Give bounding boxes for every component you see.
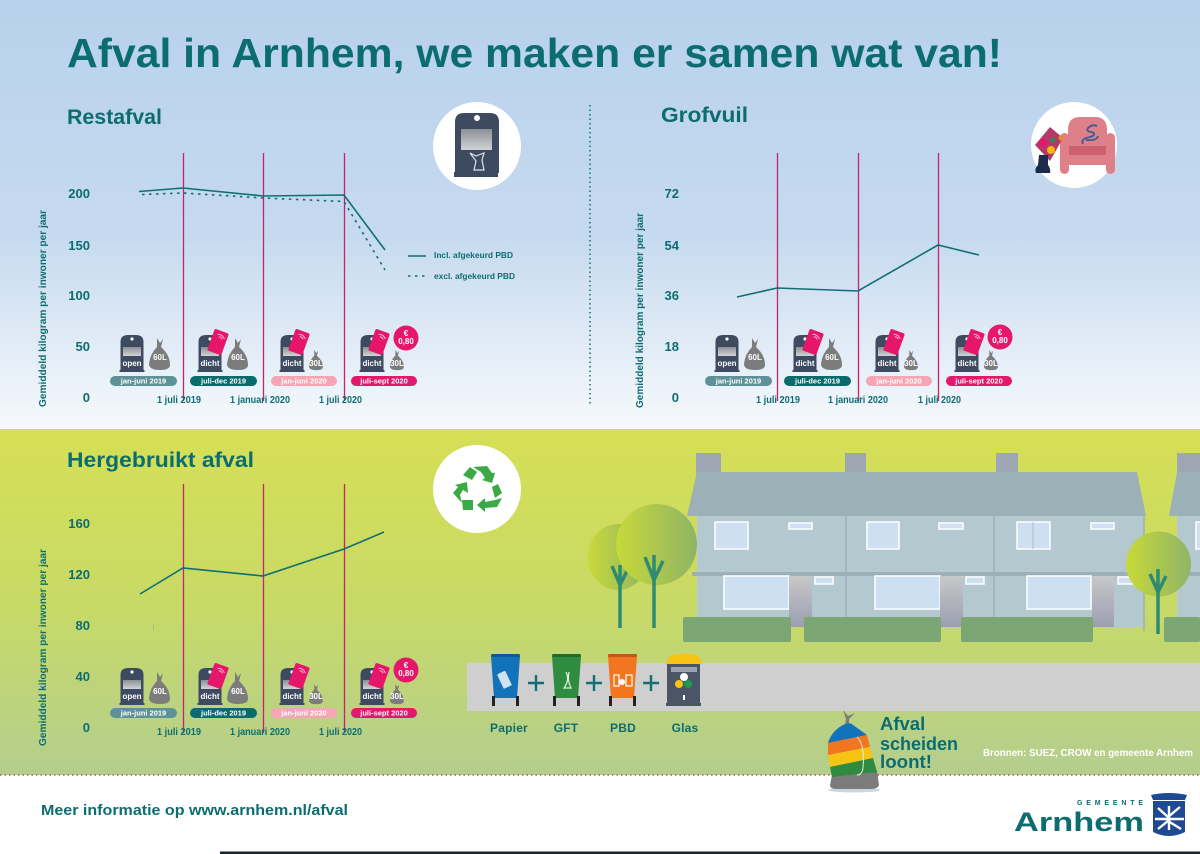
period: juli-dec 2019: dicht <box>795 359 815 368</box>
y axis ticks: 100 <box>68 288 90 303</box>
legend <box>408 250 515 281</box>
background: grass <box>0 429 1200 775</box>
panel: Hergebruikt afval <box>38 445 521 746</box>
vertical date markers <box>184 484 344 733</box>
period: jan-juni 2020: dicht <box>282 692 302 701</box>
bin labels: GFT <box>554 721 579 735</box>
background: sky <box>0 0 1200 429</box>
y axis ticks: 80 <box>76 618 90 633</box>
period: jan-juni 2019: open <box>717 359 737 368</box>
line: hergebruikt afval <box>140 532 384 594</box>
period: jan-juni 2019: 60L <box>153 353 167 362</box>
period: juli-sept 2020: 0,80 <box>992 336 1008 345</box>
period: juli-dec 2019: 60L <box>231 687 245 696</box>
period: jan-juni 2020: jan-juni 2020 <box>280 376 327 386</box>
date labels <box>756 395 961 406</box>
period: juli-dec 2019: 60L <box>825 353 839 362</box>
period: juli-sept 2020: juli-sept 2020 <box>359 376 408 386</box>
date labels: 1 januari 2020 <box>230 395 290 406</box>
vertical date markers <box>184 153 344 401</box>
period: juli-sept 2020: juli-sept 2020 <box>359 708 408 718</box>
period: juli-dec 2019: 60L <box>231 353 245 362</box>
period: jan-juni 2019: jan-juni 2019 <box>120 708 166 718</box>
period: juli-sept 2020: 30L <box>390 692 404 701</box>
period: juli-sept 2020: 30L <box>984 359 998 368</box>
slogan: scheiden <box>880 733 958 754</box>
icon: striped bag <box>828 710 880 792</box>
period: juli-dec 2019: juli-dec 2019 <box>200 376 246 386</box>
period: juli-dec 2019: juli-dec 2019 <box>794 376 840 386</box>
date labels: 1 juli 2020 <box>918 395 961 406</box>
period: juli-sept 2020: juli-sept 2020 <box>954 376 1003 386</box>
period: jan-juni 2020: jan-juni 2020 <box>280 708 327 718</box>
period: jan-juni 2019: open <box>122 692 142 701</box>
period: juli-dec 2019 <box>190 329 257 386</box>
line: incl. afgekeurd PBD <box>139 188 385 250</box>
period: jan-juni 2019 <box>110 335 177 386</box>
period: jan-juni 2019: open <box>122 359 142 368</box>
period: juli-sept 2020: dicht <box>362 359 382 368</box>
bin labels: Glas <box>672 721 699 735</box>
period: jan-juni 2019 <box>705 335 772 386</box>
period: juli-sept 2020: € <box>404 329 409 338</box>
y axis ticks: 150 <box>68 238 90 253</box>
period: jan-juni 2019: 60L <box>153 687 167 696</box>
icon: green bin GFT <box>552 654 581 706</box>
icon: blue bin Papier <box>491 654 520 706</box>
date labels: 1 januari 2020 <box>828 395 888 406</box>
slogan: Afval <box>880 713 925 734</box>
period: juli-sept 2020 <box>351 326 418 386</box>
legend: excl. afgekeurd PBD <box>434 271 515 281</box>
period: juli-dec 2019: dicht <box>200 359 220 368</box>
illustration: trees <box>588 504 1191 634</box>
period: juli-sept 2020: 0,80 <box>398 669 414 678</box>
period: jan-juni 2020: 30L <box>904 359 918 368</box>
sources: Bronnen: SUEZ, CROW en gemeente Arnhem <box>983 748 1193 759</box>
heading: Restafval: Restafval <box>67 105 162 129</box>
period: jan-juni 2019: 60L <box>748 353 762 362</box>
period: juli-sept 2020: 30L <box>390 359 404 368</box>
icon: orange bin PBD <box>608 654 637 706</box>
period: juli-dec 2019: dicht <box>200 692 220 701</box>
logo: Gemeente Arnhem: Arnhem <box>1014 807 1144 837</box>
period: juli-sept 2020: dicht <box>362 692 382 701</box>
date labels <box>157 727 362 738</box>
period: juli-sept 2020: 0,80 <box>398 337 414 346</box>
period: juli-sept 2020: dicht <box>957 359 977 368</box>
period: jan-juni 2020 <box>271 329 337 386</box>
date labels: 1 juli 2019 <box>756 395 800 406</box>
slogan <box>880 713 958 772</box>
period: jan-juni 2020 <box>866 329 932 386</box>
footer background <box>0 775 1200 854</box>
panel: Grofvuil <box>635 102 1117 408</box>
period: jan-juni 2020: jan-juni 2020 <box>875 376 922 386</box>
icon: sofa and flowers in circle <box>1031 102 1117 188</box>
bin labels: Papier <box>490 721 528 735</box>
period: juli-dec 2019 <box>784 329 851 386</box>
period: jan-juni 2020 <box>271 663 337 718</box>
y axis label: Gemiddeld kilogram per inwoner per jaar <box>38 210 49 407</box>
y axis label: Gemiddeld kilogram per inwoner per jaar <box>38 549 49 746</box>
y axis ticks <box>68 186 90 405</box>
date labels <box>157 395 362 406</box>
y axis ticks: 160 <box>68 516 90 531</box>
period: jan-juni 2019: jan-juni 2019 <box>715 376 761 386</box>
period: juli-sept 2020 <box>351 658 418 718</box>
title: Afval in Arnhem, we maken er samen wat van! <box>67 30 1002 76</box>
bin labels: PBD <box>610 721 636 735</box>
period: jan-juni 2020: dicht <box>282 359 302 368</box>
y axis ticks <box>665 186 680 405</box>
period: juli-sept 2020 <box>946 324 1012 386</box>
period: jan-juni 2020: dicht <box>877 359 897 368</box>
period: jan-juni 2020: 30L <box>309 692 323 701</box>
period: jan-juni 2020: 30L <box>309 359 323 368</box>
y axis ticks: 0 <box>83 390 90 405</box>
y axis ticks: 50 <box>76 339 90 354</box>
y axis ticks: 120 <box>68 567 90 582</box>
y axis ticks: 40 <box>76 669 90 684</box>
legend: Incl. afgekeurd PBD <box>434 250 513 260</box>
icon: glass container <box>666 654 702 706</box>
y axis ticks: 36 <box>665 288 679 303</box>
date labels: 1 juli 2019 <box>157 727 201 738</box>
footer link text: Meer informatie op www.arnhem.nl/afval <box>41 802 348 819</box>
icon: container in circle <box>433 102 521 190</box>
period: juli-sept 2020: € <box>404 661 409 670</box>
heading: Grofvuil: Grofvuil <box>661 103 748 127</box>
y axis ticks: 0 <box>83 720 90 735</box>
bin labels <box>490 721 699 735</box>
illustration: hedges <box>683 617 1200 642</box>
date labels: 1 juli 2019 <box>157 395 201 406</box>
panel: Restafval <box>38 102 521 407</box>
slogan: loont! <box>880 751 932 772</box>
date labels: 1 juli 2020 <box>319 395 362 406</box>
icon: recycling in circle <box>433 445 521 533</box>
line: grofvuil <box>737 245 979 297</box>
date labels: 1 januari 2020 <box>230 727 290 738</box>
period: juli-dec 2019: juli-dec 2019 <box>200 708 246 718</box>
plus <box>528 675 544 691</box>
plus <box>643 675 659 691</box>
period: juli-sept 2020: € <box>998 328 1003 337</box>
date labels: 1 juli 2020 <box>319 727 362 738</box>
period: juli-dec 2019 <box>190 663 257 718</box>
y axis ticks: 54 <box>665 238 680 253</box>
vertical date markers <box>778 153 938 401</box>
period: jan-juni 2019: jan-juni 2019 <box>120 376 166 386</box>
y axis ticks: 200 <box>68 186 90 201</box>
line: excl. afgekeurd PBD <box>142 193 385 270</box>
logo: Gemeente Arnhem: GEMEENTE <box>1077 800 1143 807</box>
y axis ticks: 0 <box>672 390 679 405</box>
y axis label: Gemiddeld kilogram per inwoner per jaar <box>635 213 646 408</box>
plus <box>586 675 602 691</box>
y axis ticks: 18 <box>665 339 679 354</box>
logo: Gemeente Arnhem <box>1014 793 1187 837</box>
y axis ticks <box>68 516 90 735</box>
heading: Hergebruikt afval: Hergebruikt afval <box>67 448 254 472</box>
illustration: houses <box>687 453 1200 631</box>
street <box>467 663 1200 711</box>
period: jan-juni 2019 <box>110 668 177 718</box>
y axis ticks: 72 <box>665 186 679 201</box>
